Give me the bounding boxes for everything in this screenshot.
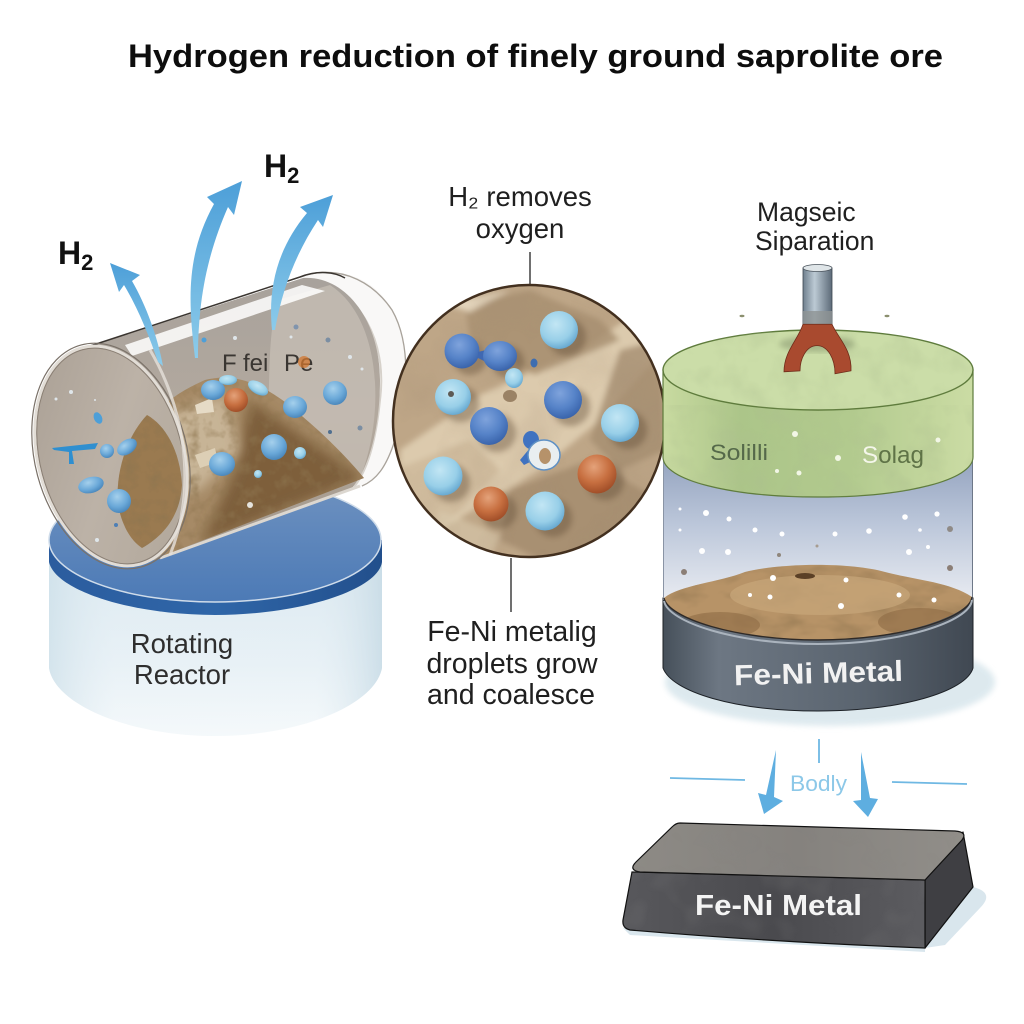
vessel shadow: [665, 638, 995, 726]
droplet shadows: [432, 318, 647, 537]
label: H2 right: 2: [287, 163, 299, 188]
magnet: [779, 264, 855, 374]
label: rotating reactor: Rotating: [131, 628, 233, 659]
title: Hydrogen reduction of finely ground saprolite ore: [128, 38, 943, 74]
glass reactor tube: [31, 272, 406, 570]
label: Fe-Ni droplets: Fe-Ni metalig: [427, 616, 597, 648]
slag layer: [660, 328, 976, 500]
label: magnetic separation: Magseic: [757, 197, 856, 227]
label: H2 removes oxygen: H₂ removes: [448, 181, 592, 212]
panel: rotating reactor: [8, 148, 406, 736]
tube body: [37, 278, 380, 560]
label: magnetic separation: Siparation: [755, 226, 874, 256]
label: Fe text in tube: F: [222, 350, 237, 377]
arrow: H2 left: [110, 263, 163, 366]
label: metal: Fe-Ni Metal: [734, 656, 903, 692]
ore pile: [162, 378, 364, 556]
label: H2 left: 2: [81, 250, 93, 275]
label: Fe-Ni droplets: and coalesce: [427, 679, 595, 711]
droplets in tube: [52, 375, 347, 513]
rock facets: [394, 286, 665, 560]
ore seen through opening: [118, 415, 182, 548]
panel: separation vessel: [660, 264, 995, 726]
outer glass end: [300, 272, 406, 500]
panel: metal ingot: [620, 820, 986, 955]
label: Bodly: Bodly: [790, 771, 847, 796]
arrow: right down: [853, 752, 878, 817]
label: Fe text in tube: Pe: [284, 350, 313, 377]
droplets in circle: [424, 311, 639, 530]
panel: magnified ore particle: [393, 285, 665, 560]
arrow: left down: [758, 750, 783, 814]
metal layer: [663, 598, 973, 711]
glass section: [663, 450, 973, 600]
label: rotating reactor: Reactor: [134, 659, 230, 690]
white specks: [678, 508, 953, 575]
label: slag left: Solilli: [710, 440, 768, 465]
arrow: H2 centre: [191, 181, 242, 358]
label: H2 left: H: [58, 235, 81, 271]
connector bottom: [510, 558, 512, 612]
arrow: H2 right: [271, 195, 333, 330]
pedestal: [49, 560, 382, 736]
blue disc: [49, 478, 382, 615]
panel: gravity arrows: [670, 739, 967, 817]
connector top: [529, 252, 531, 286]
label: H2 right: H: [264, 148, 287, 184]
label: slag right: Solag: [862, 442, 924, 469]
front opening: [13, 330, 209, 582]
soil: [664, 565, 972, 640]
label: ingot: Fe-Ni Metal: [695, 890, 862, 922]
small tube specks: [54, 324, 364, 542]
label: Fe-Ni droplets: droplets grow: [426, 648, 598, 680]
dust specks: [740, 315, 890, 317]
label: Fe text in tube: fei: [243, 350, 268, 377]
label: H2 removes oxygen: oxygen: [476, 213, 564, 244]
ingot shadow: [925, 887, 986, 948]
